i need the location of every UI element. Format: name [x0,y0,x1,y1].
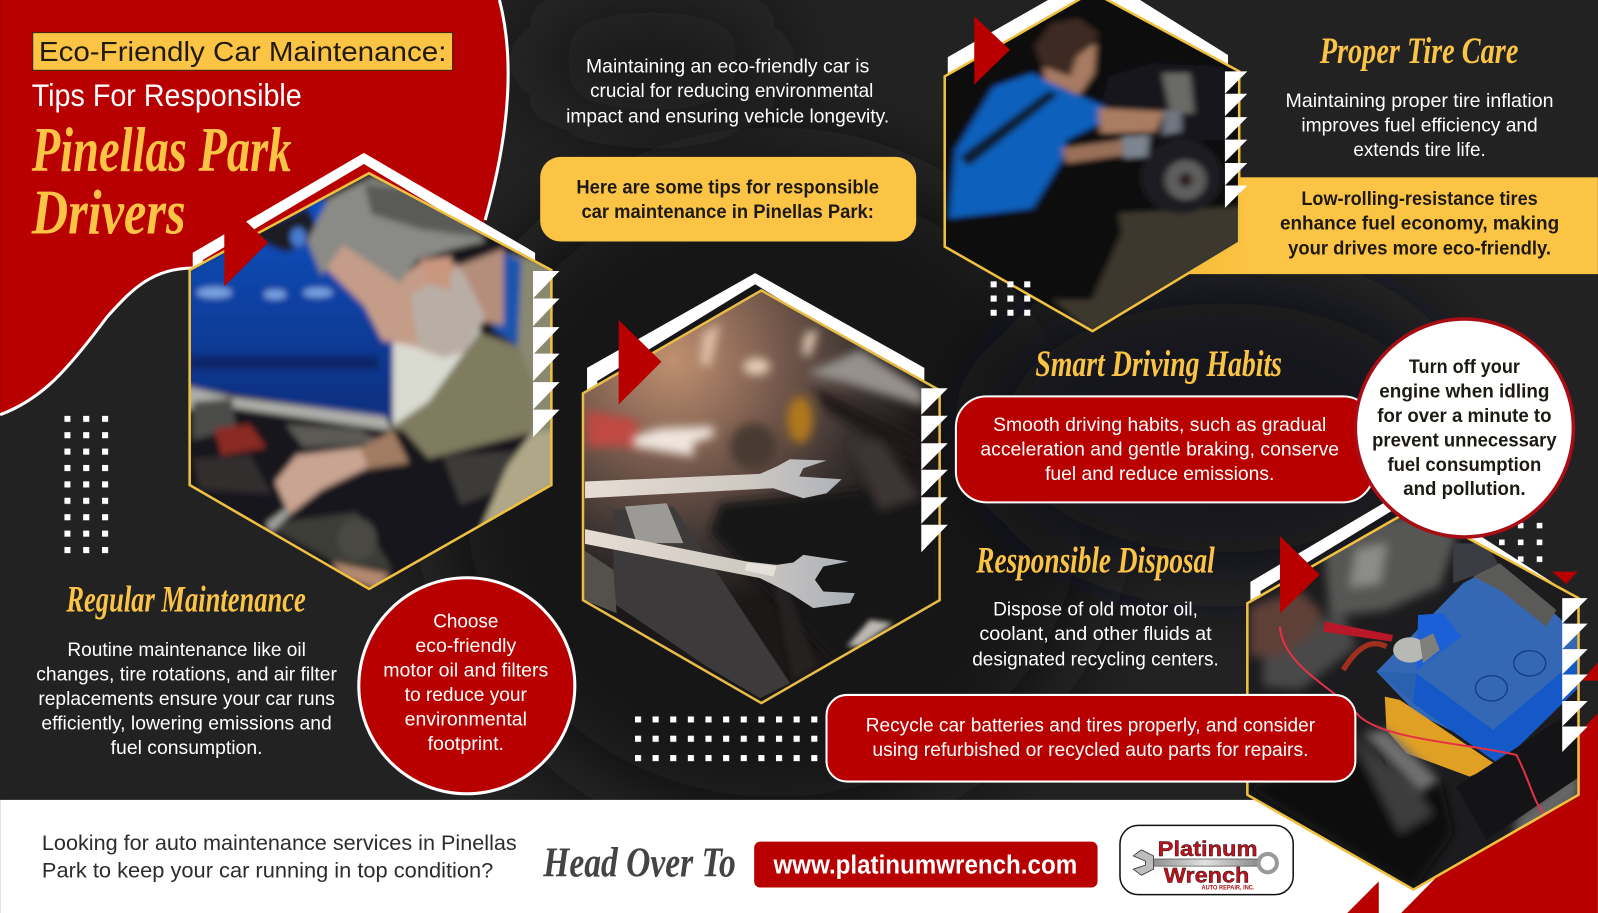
yellow band: tire tip [1172,177,1598,274]
red corner shapes [1347,572,1598,913]
callout circle: eco-friendly oil: motor oil and filters [383,660,548,682]
section: responsible disposal: coolant, and other fluids at [979,623,1212,645]
section: proper tire care: Low-rolling-resistance tires [1301,188,1538,210]
website button [754,842,1098,888]
callout circle: eco-friendly oil: Choose [433,611,498,633]
section: regular maintenance: replacements ensure your car runs [38,688,335,710]
intro text: crucial for reducing environmental [590,80,873,102]
callout circle: idling tip: for over a minute to [1377,405,1552,427]
callout box: smart driving: Smooth driving habits, such as gradual [993,414,1326,436]
section: proper tire care: enhance fuel economy, making [1280,212,1559,234]
callout box: recycling [827,695,1355,782]
title: Pinellas Park [31,115,292,185]
callout circle: eco-friendly oil: eco-friendly [415,635,517,657]
callout circle: idling tip: fuel consumption [1387,454,1541,476]
title: Eco-Friendly Car Maintenance: [39,36,446,67]
footer question text [42,831,517,882]
title [31,33,453,247]
logo: Platinum Wrench: Platinum [1158,837,1258,861]
callout box: smart driving: acceleration and gentle braking, conserve [980,438,1339,460]
callout circle: idling tip: prevent unnecessary [1372,429,1557,451]
tips callout: car maintenance in Pinellas Park: [581,201,874,223]
callout circle: idling tip [1355,319,1573,537]
photo hexagon: car battery [1243,489,1588,893]
logo: Platinum Wrench [1120,825,1293,895]
intro text [566,55,889,127]
section: regular maintenance: fuel consumption. [111,737,263,759]
section: regular maintenance [36,578,337,759]
callout circle: idling tip: engine when idling [1379,380,1549,402]
section heading: smart driving habits: Smart Driving Habits [1035,343,1282,384]
section: regular maintenance: efficiently, lowering emissions and [41,713,332,735]
title: Tips For Responsible [32,77,302,113]
photo hexagon: mechanic inspecting engine [179,153,571,597]
callout box: smart driving [956,396,1374,502]
dots: under wrench photo [635,716,819,762]
section: responsible disposal: Dispose of old motor oil, [993,598,1198,620]
callout box: smart driving: fuel and reduce emissions. [1045,463,1274,485]
section: proper tire care [1280,30,1559,260]
section: proper tire care: extends tire life. [1353,139,1486,161]
logo: Platinum Wrench: Wrench [1164,863,1249,887]
section: regular maintenance: Routine maintenance like oil [67,639,306,661]
section: responsible disposal [972,540,1219,670]
logo: Platinum Wrench: AUTO REPAIR, INC. [1201,885,1255,892]
callout circle: eco-friendly oil [359,578,575,794]
section: proper tire care: Maintaining proper tire inflation [1286,90,1554,112]
footer question text: Looking for auto maintenance services in Pinellas [42,831,517,855]
tips callout: Here are some tips for responsible [576,177,879,199]
photo hexagon: wrenches in engine bay [577,273,948,710]
footer band [0,800,1598,913]
section: responsible disposal: designated recycling centers. [972,648,1219,670]
callout circle: idling tip: Turn off your [1409,356,1520,378]
callout circle: eco-friendly oil: to reduce your [405,684,527,706]
photo hexagon: mechanic at wheel [930,0,1254,340]
head over to: Head Over To [542,839,736,886]
dots: behind white circle [1499,523,1546,563]
callout box: recycling: using refurbished or recycled auto parts for repairs. [872,739,1308,761]
section: regular maintenance: Regular Maintenance [66,578,306,619]
intro text: Maintaining an eco-friendly car is [586,55,869,77]
section: proper tire care: your drives more eco-friendly. [1288,238,1551,260]
dots: left column [64,416,114,554]
section: regular maintenance: changes, tire rotations, and air filter [36,664,337,686]
title: Drivers [31,177,186,247]
red blob header background [0,0,508,415]
callout circle: eco-friendly oil: footprint. [428,733,504,755]
website button: www.platinumwrench.com [773,851,1077,879]
section: proper tire care: improves fuel efficiency and [1301,114,1538,136]
callout circle: idling tip: and pollution. [1403,478,1526,500]
intro text: impact and ensuring vehicle longevity. [566,105,889,127]
tips callout [540,157,916,241]
callout box: recycling: Recycle car batteries and tires properly, and consider [866,715,1316,737]
callout circle: eco-friendly oil: environmental [405,709,527,731]
dots: under tire photo [991,281,1031,316]
footer question text: Park to keep your car running in top condition? [42,858,493,882]
section: proper tire care: Proper Tire Care [1319,30,1518,71]
section: responsible disposal: Responsible Disposal [976,540,1215,581]
